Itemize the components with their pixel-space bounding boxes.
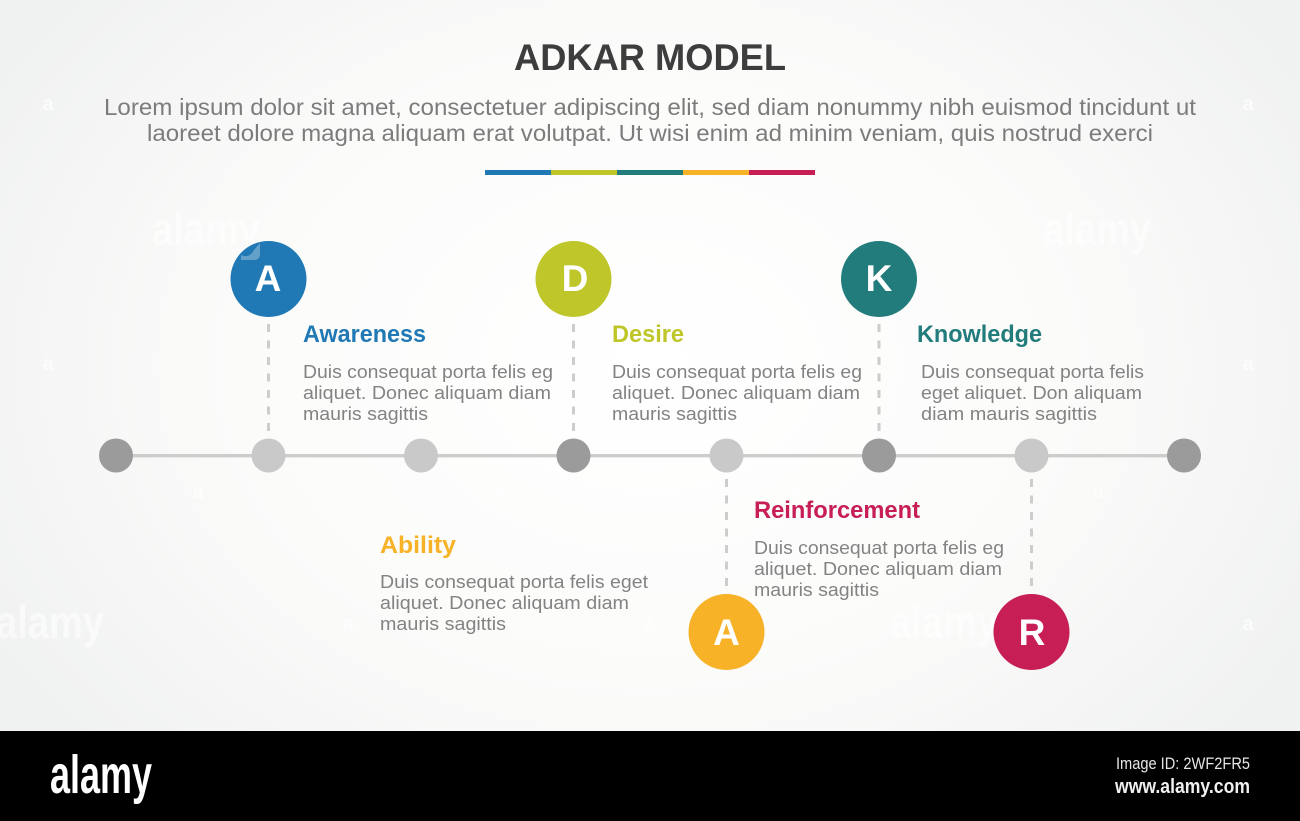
badge: R Reinforcement: R xyxy=(1019,612,1045,653)
text block: Reinforcement: mauris sagittis xyxy=(754,580,879,600)
text block: Ability: aliquet. Donec aliquam diam xyxy=(380,593,629,613)
color divider bar xyxy=(485,170,815,175)
text block: Knowledge: Duis consequat porta felis xyxy=(921,362,1144,382)
connector: Desire xyxy=(572,324,575,432)
text block: Knowledge: diam mauris sagittis xyxy=(921,404,1097,424)
small watermark marks xyxy=(42,93,1254,635)
badge: K Knowledge: K xyxy=(866,258,893,299)
intro text xyxy=(104,94,1197,146)
text block: Awareness: Duis consequat porta felis eg xyxy=(303,362,553,382)
text block: Reinforcement: Reinforcement xyxy=(754,497,920,524)
badge: K Knowledge xyxy=(841,241,917,317)
text block: Awareness: aliquet. Donec aliquam diam xyxy=(303,383,551,403)
small watermark marks: a xyxy=(492,481,504,503)
connector: Ability xyxy=(725,479,728,588)
small watermark marks: a xyxy=(642,93,654,115)
badge: A Awareness: A xyxy=(255,258,281,299)
badge: A Ability: A xyxy=(713,612,740,653)
watermarks: alamy xyxy=(152,203,260,255)
small watermark marks: a xyxy=(1242,93,1254,115)
badge: D Desire: D xyxy=(562,258,588,299)
text block: Knowledge xyxy=(917,321,1144,424)
small watermark marks: a xyxy=(42,93,54,115)
text block: Reinforcement: aliquet. Donec aliquam diam xyxy=(754,559,1002,579)
text block: Reinforcement xyxy=(754,497,1004,600)
footer logo: alamy xyxy=(50,745,152,805)
footer bar xyxy=(0,731,1300,821)
text block: Ability xyxy=(380,532,648,634)
text block: Ability: Duis consequat porta felis eget xyxy=(380,572,648,592)
text block: Ability: Ability xyxy=(380,532,457,559)
intro text: laoreet dolore magna aliquam erat volutpat. Ut wisi enim ad minim veniam, quis nostrud exerci xyxy=(147,120,1153,146)
text block: Knowledge: eget aliquet. Don aliquam xyxy=(921,383,1142,403)
small watermark marks: a xyxy=(1242,353,1254,375)
text block: Awareness xyxy=(303,321,553,424)
text block: Desire: Desire xyxy=(612,321,684,348)
badge: A Ability xyxy=(688,594,764,670)
badge: A Awareness xyxy=(230,241,306,317)
badge: R Reinforcement xyxy=(994,594,1070,670)
connector: Awareness xyxy=(267,324,270,432)
watermarks: alamy xyxy=(1043,203,1151,255)
intro text: Lorem ipsum dolor sit amet, consectetuer adipiscing elit, sed diam nonummy nibh euismod tincidunt ut xyxy=(104,94,1197,120)
small watermark marks: a xyxy=(792,481,804,503)
text block: Ability: mauris sagittis xyxy=(380,614,506,634)
small watermark marks: a xyxy=(942,93,954,115)
title: ADKAR MODEL xyxy=(514,37,786,78)
badge: D Desire xyxy=(536,241,612,317)
text block: Knowledge: Knowledge xyxy=(917,321,1042,348)
small watermark marks: a xyxy=(342,613,354,635)
text block: Awareness: mauris sagittis xyxy=(303,404,428,424)
text block: Desire: Duis consequat porta felis eg xyxy=(612,362,862,382)
text block: Awareness: Awareness xyxy=(303,321,426,348)
small watermark marks: a xyxy=(1092,481,1104,503)
connector: Knowledge xyxy=(878,324,880,432)
small watermark marks: a xyxy=(342,93,354,115)
image id: Image ID: 2WF2FR5 xyxy=(1116,754,1250,773)
text block: Desire xyxy=(612,321,862,424)
small watermark marks: a xyxy=(42,353,54,375)
website: www.alamy.com xyxy=(1114,776,1250,798)
timeline xyxy=(99,438,1201,472)
small watermark marks: a xyxy=(192,481,204,503)
watermarks: alamy xyxy=(890,596,998,648)
small watermark marks: a xyxy=(642,613,654,635)
text block: Reinforcement: Duis consequat porta felis eg xyxy=(754,538,1004,558)
watermarks xyxy=(0,203,1151,648)
text block: Desire: aliquet. Donec aliquam diam xyxy=(612,383,860,403)
small watermark marks: a xyxy=(1242,613,1254,635)
connector: Reinforcement xyxy=(1030,479,1033,588)
text block: Desire: mauris sagittis xyxy=(612,404,737,424)
